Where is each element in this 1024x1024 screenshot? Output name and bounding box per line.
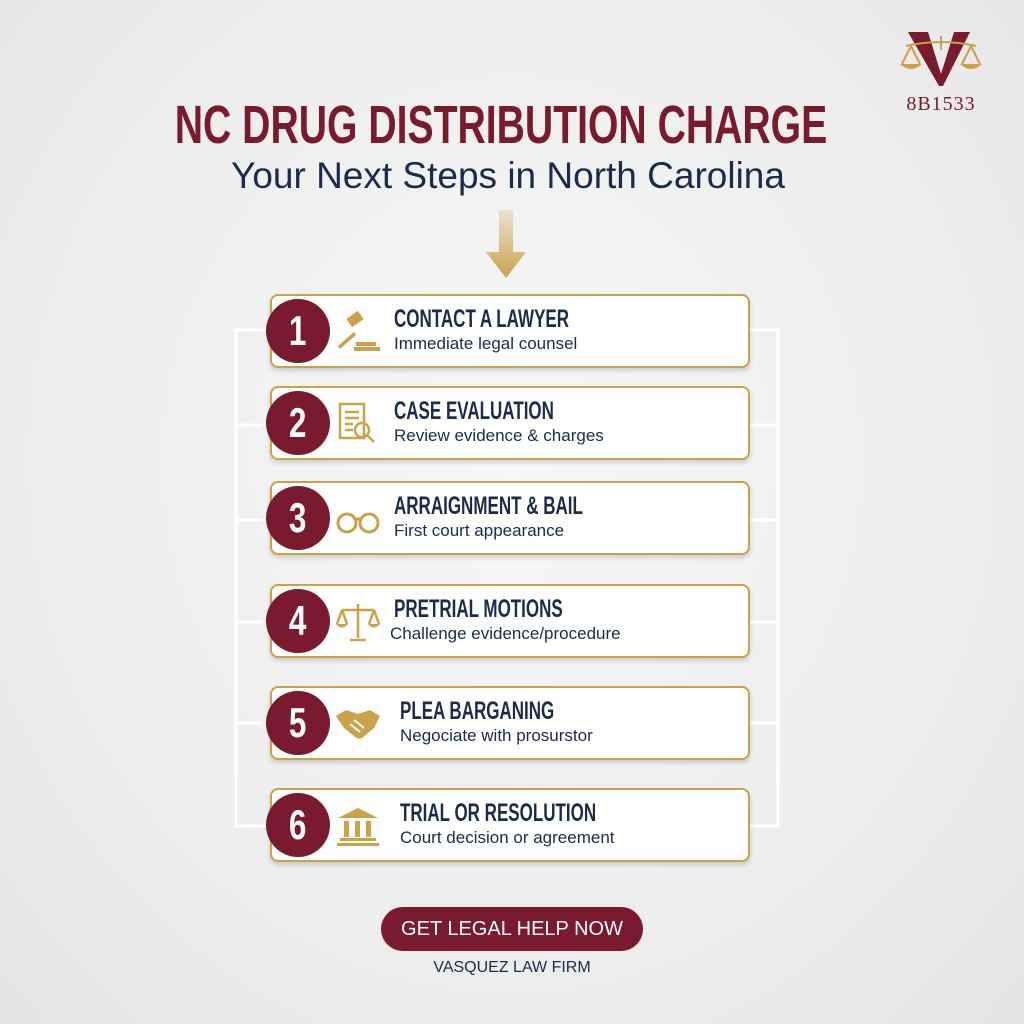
step 5: PLEA BARGANING <box>400 697 554 725</box>
step 3 <box>270 481 750 555</box>
subtitle: Your Next Steps in North Carolina <box>231 155 785 196</box>
step 3: First court appearance <box>394 521 564 540</box>
step 1: 1 <box>289 307 307 354</box>
step 2: CASE EVALUATION <box>394 397 554 425</box>
step 6: TRIAL OR RESOLUTION <box>400 799 596 827</box>
firm name: VASQUEZ LAW FIRM <box>433 959 591 976</box>
logo <box>900 32 982 115</box>
step 1 <box>270 294 750 368</box>
step 3: 3 <box>289 494 307 541</box>
step 4: 4 <box>289 597 307 644</box>
step 5: Negociate with prosurstor <box>400 726 593 745</box>
step 2: Review evidence & charges <box>394 426 604 445</box>
step 4: PRETRIAL MOTIONS <box>394 595 563 623</box>
step 4: Challenge evidence/procedure <box>390 624 621 643</box>
step 4 <box>270 584 750 658</box>
logo: 8B1533 <box>906 93 976 115</box>
step 1: CONTACT A LAWYER <box>394 305 569 333</box>
step 3: ARRAIGNMENT & BAIL <box>394 492 583 520</box>
step 5 <box>270 686 750 760</box>
step 6 <box>270 788 750 862</box>
step 5: 5 <box>289 699 307 746</box>
step 6: Court decision or agreement <box>400 828 615 847</box>
CTA button: GET LEGAL HELP NOW <box>401 918 623 940</box>
step 2 <box>270 386 750 460</box>
step 1: Immediate legal counsel <box>394 334 577 353</box>
CTA button <box>381 907 643 951</box>
arrow <box>486 210 526 278</box>
title: NC DRUG DISTRIBUTION CHARGE <box>175 95 827 155</box>
step 2: 2 <box>289 399 307 446</box>
step 6: 6 <box>289 801 307 848</box>
